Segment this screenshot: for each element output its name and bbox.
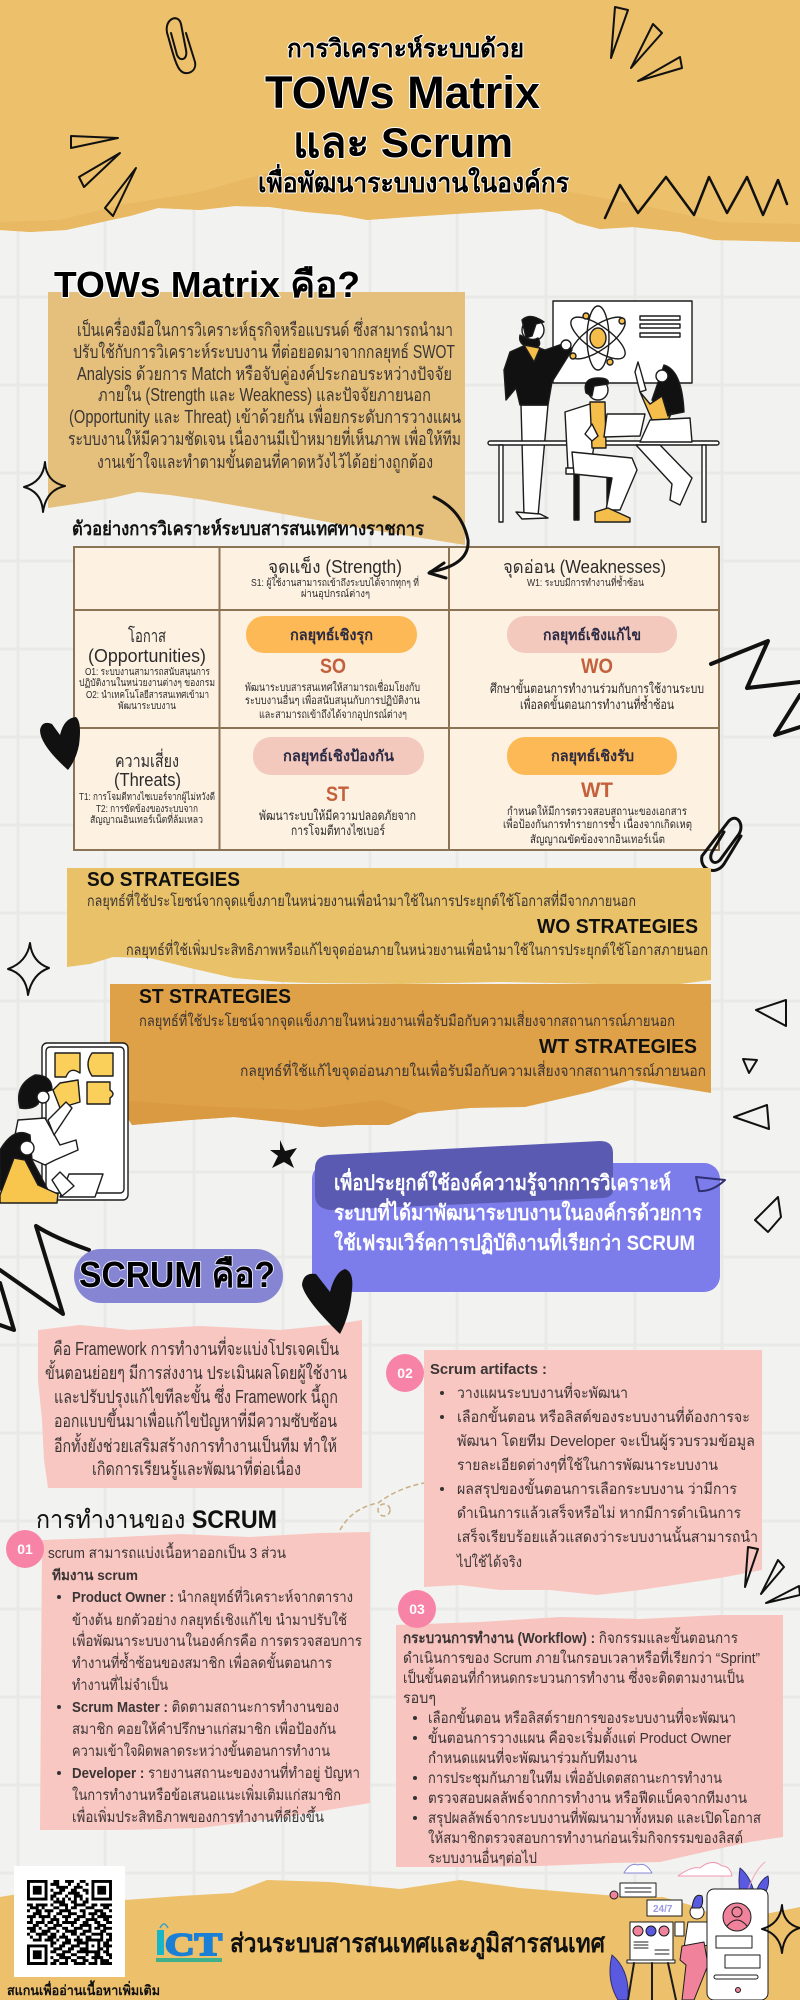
text: artifacts: [430, 1361, 758, 1571]
header: weaknesses: [503, 557, 666, 589]
icon: zigzag: [605, 177, 787, 218]
text block: definition: [68, 317, 461, 473]
row: opportunities: [79, 625, 215, 712]
logo: ICT: [156, 1924, 222, 1962]
logo: ICT: CT: [165, 1926, 222, 1962]
cell: WT: [503, 737, 692, 846]
24/7 sign: 24/7: [653, 1904, 673, 1915]
text: artifacts: ผลสรุปของขั้นตอนการเลือกระบบงาน ว่ามีการ: [457, 1478, 737, 1499]
header: weaknesses: W1: ระบบมีการทำงานที่ซ้ำซ้อน: [527, 575, 644, 589]
text: workflow: สรุปผลลัพธ์จากระบบงานที่พัฒนามาทั้งหมด และเปิดโอกาส: [428, 1807, 761, 1828]
QR code: [14, 1866, 125, 1977]
text: team: scrum สามารถแบ่งเนื้อหาออกเป็น 3 ส่วน: [48, 1542, 286, 1562]
row: opportunities: โอกาส: [128, 625, 166, 646]
text block: definition: ระบบงานให้มีความชัดเจน เนื่องานมีเป้าหมายที่เห็นภาพ เพื่อให้ทีม: [68, 426, 461, 449]
text: team: Developer : รายงานสถานะของงานที่ทำอยู่ ปัญหา: [72, 1762, 360, 1782]
panel: header torn paper: [0, 0, 800, 242]
text: callout: ใช้เฟรมเวิร์คการปฏิบัติงานที่เรียกว่า SCRUM: [334, 1227, 695, 1255]
text: SO strategies: SO STRATEGIES: [87, 869, 240, 891]
row: opportunities: ปฏิบัติงานในหน่วยงานต่างๆ ของกรม: [79, 677, 215, 689]
row: threats: T1: การโจมตีทางไซเบอร์จากผู้ไม่หวังดี: [79, 790, 215, 803]
text: team: ข้างต้น ยกตัวอย่าง กลยุทธ์เชิงแก้ไข นำมาปรับใช้: [72, 1611, 347, 1630]
panel: purple callout: [312, 1141, 720, 1292]
row: opportunities: O1: ระบบงานสามารถสนับสนุนการ: [85, 667, 211, 678]
text: team: ทีมงาน scrum: [52, 1567, 138, 1583]
text: artifacts: รายละเอียดต่างๆที่ใช้ในการพัฒนาระบบงาน: [457, 1454, 718, 1474]
text: ST strategies: ST STRATEGIES: [139, 986, 291, 1008]
text: WO strategies: กลยุทธ์ที่ใช้เพิ่มประสิทธิภาพหรือแก้ไขจุดอ่อนภายในหน่วยงานเพื่อนำมาใช้ในการประยุกต์ใช้โอกาสภายนอก: [126, 939, 708, 960]
cell: SO: และสามารถเข้าถึงได้จากอุปกรณ์ต่างๆ: [259, 708, 407, 721]
text: team: ความเข้าใจผิดพลาดระหว่างขั้นตอนการทำงาน: [72, 1740, 330, 1760]
heading: SCRUM คือ?: SCRUM คือ?: [79, 1254, 275, 1295]
text block: definition: เป็นเครื่องมือในการวิเคราะห์ธุรกิจหรือแบรนด์ ซึ่งสามารถนำมา: [77, 317, 453, 341]
text: artifacts: ดำเนินการแล้วเสร็จหรือไม่ หากมีการดำเนินการ: [457, 1503, 741, 1522]
text: workflow: [403, 1627, 761, 1867]
panel: step 03 workflow: [396, 1590, 783, 1867]
icon: star: [270, 1140, 297, 1168]
text: definition: เกิดการเรียนรู้และพัฒนาที่ต่อเนื่อง: [92, 1456, 301, 1480]
icon: sparkle footer: [762, 1905, 800, 1953]
cell: WT: สัญญาณขัดข้องจากอินเทอร์เน็ต: [530, 831, 665, 846]
text: workflow: การประชุมกันภายในทีม เพื่ออัปเดตสถานะการทำงาน: [428, 1767, 722, 1788]
text: workflow: ให้สมาชิกตรวจสอบการทำงานก่อนเริ่มกิจกรรมของลิสต์: [428, 1827, 743, 1847]
badge 02: [386, 1354, 424, 1392]
cell: WT: เพื่อป้องกันการทำรายการซ้ำ เนื่องจากเกิดเหตุ: [503, 816, 692, 831]
seated woman: [635, 362, 692, 505]
text: WO strategies: [126, 916, 708, 960]
cell: WT: กำหนดให้มีการตรวจสอบสถานะของเอกสาร: [507, 805, 687, 818]
text: team: [48, 1542, 362, 1826]
header: strength: ผ่านอุปกรณ์ต่างๆ: [301, 588, 370, 600]
text block: definition: ภายใน (Strength และ Weakness) และปัจจัยภายนอก: [98, 384, 431, 405]
text: definition: [45, 1336, 347, 1480]
text: WT strategies: [240, 1036, 706, 1081]
row: threats: ความเสี่ยง: [115, 748, 179, 771]
badge 03: 03: [409, 1601, 425, 1617]
icon: paperclip right: [702, 818, 741, 870]
man: [12, 1075, 78, 1165]
text: workflow: ขั้นตอนการวางแผน คือจะเริ่มตั้งแต่ Product Owner: [428, 1727, 731, 1747]
text: team: สมาชิก คอยให้คำปรึกษาแก่สมาชิก เพื่อป้องกัน: [72, 1718, 336, 1738]
text: department name: ส่วนระบบสารสนเทศและภูมิสารสนเทศ: [230, 1928, 605, 1960]
seated man: [565, 378, 645, 522]
text: definition: ออกแบบขึ้นมาเพื่อแก้ไขปัญหาที่มีความซับซ้อน: [54, 1408, 337, 1431]
text: team: Product Owner : นำกลยุทธ์ที่วิเคราะห์จากตาราง: [72, 1586, 353, 1607]
header: strength: [251, 555, 419, 600]
header: strength: จุดแข็ง (Strength): [268, 555, 402, 578]
cell: ST: กลยุทธ์เชิงป้องกัน: [283, 747, 395, 766]
plants: [610, 1862, 769, 2000]
badge 01: [6, 1530, 44, 1568]
row: threats: [79, 748, 215, 826]
text: callout: เพื่อประยุกต์ใช้องค์ความรู้จากการวิเคราะห์: [334, 1167, 671, 1197]
cell: SO: SO: [320, 655, 346, 678]
table: [488, 441, 719, 522]
text: WT strategies: WT STRATEGIES: [539, 1036, 697, 1058]
presenter: [675, 1895, 710, 2000]
text: SO strategies: กลยุทธ์ที่ใช้ประโยชน์จากจุดแข็งภายในหน่วยงานเพื่อนำมาใช้ในการประยุกต์ใช้โอกาสที่มีจากภายนอก: [87, 890, 636, 911]
text: workflow: ระบบงานอื่นๆต่อไป: [428, 1847, 537, 1867]
text: team: ทำงานที่ซ้ำซ้อนของสมาชิก เพื่อลดขั้นตอนการ: [72, 1652, 332, 1672]
panel: SO and WO strategies: [67, 868, 711, 984]
text: artifacts: เลือกขั้นตอน หรือลิสต์ของระบบงานที่ต้องการจะ: [457, 1406, 750, 1426]
text: artifacts: วางแผนระบบงานที่จะพัฒนา: [457, 1382, 628, 1402]
row: threats: (Threats): [114, 770, 181, 790]
panel: TOWs definition: [48, 292, 465, 545]
illustration: mobile and presenter: [610, 1862, 769, 2000]
illustration: people with puzzle board: [0, 1043, 128, 1203]
text: workflow: ตรวจสอบผลลัพธ์จากการทำงาน หรือฟีดแบ็คจากทีมงาน: [428, 1788, 747, 1807]
icon: paperclip top: [167, 18, 195, 73]
cell: ST: พัฒนาระบบให้มีความปลอดภัยจาก: [259, 808, 416, 823]
text block: definition: งานเข้าใจและทำตามขั้นตอนที่คาดหวังไว้ได้อย่างถูกต้อง: [97, 449, 433, 473]
cell: SO: ระบบงานอื่นๆ เพื่อสนับสนุนกับการปฏิบัติงาน: [245, 692, 420, 707]
table: TOWS matrix: [74, 547, 719, 850]
icon: heart center: [302, 1269, 352, 1334]
icon: sparkle left: [24, 462, 65, 512]
panel: ST and WT strategies: [110, 984, 711, 1127]
title line 2: TOWs Matrix: [265, 67, 540, 118]
icon: triangles right: [734, 1000, 786, 1232]
row: threats: T2: การขัดข้องของระบบจาก: [96, 803, 198, 815]
whiteboard: [553, 301, 692, 383]
text: workflow: กำหนดแผนที่จะพัฒนาร่วมกับทีมงาน: [428, 1747, 637, 1767]
cell: ST: การโจมตีทางไซเบอร์: [291, 823, 385, 838]
row: opportunities: (Opportunities): [88, 646, 206, 666]
text: workflow: รอบๆ: [403, 1690, 436, 1707]
cell: ST: ST: [326, 783, 349, 806]
arrow: dashed connector: [340, 1483, 424, 1530]
arrow: curved to table: [429, 497, 468, 578]
text block: definition: Analysis ด้วยการ Match หรือจับคู่องค์ประกอบระหว่างปัจจัย: [77, 364, 452, 385]
cell: SO: พัฒนาระบบสารสนเทศให้สามารถเชื่อมโยงกับ: [245, 679, 420, 694]
text block: definition: ปรับใช้กับการวิเคราะห์ระบบงาน ที่ต่อยอดมาจากกลยุทธ์ SWOT: [73, 339, 455, 363]
text: team: ทำงานที่ไม่จำเป็น: [72, 1674, 168, 1694]
text: team: เพื่อเพิ่มประสิทธิภาพของการทำงานที่ดียิ่งขึ้น: [72, 1806, 324, 1826]
text: SO strategies: [87, 869, 636, 911]
woman: [0, 1133, 103, 1203]
panel: scrum definition: [38, 1320, 362, 1488]
cell: WO: [490, 616, 704, 712]
icon: squiggle right: [711, 641, 800, 735]
icon: spikes top right: [611, 7, 682, 81]
heading: TOWs Matrix คือ?: TOWs Matrix คือ?: [54, 264, 360, 305]
text: artifacts: ไปใช้ได้จริง: [456, 1553, 522, 1571]
panel: step 01 team: [6, 1530, 370, 1830]
text: ST strategies: [139, 986, 675, 1031]
clouds: [624, 1862, 732, 1876]
title: [258, 34, 569, 198]
icon: heart left: [40, 717, 80, 770]
cell: WO: กลยุทธ์เชิงแก้ไข: [543, 625, 641, 645]
text: workflow: กระบวนการทำงาน (Workflow) : กิจกรรมและขั้นตอนการ: [403, 1627, 738, 1647]
text: callout: [334, 1167, 703, 1255]
text: definition: อีกทั้งยังช่วยเสริมสร้างการทำงานเป็นทีม ทำให้: [54, 1433, 337, 1456]
text: workflow: เลือกขั้นตอน หรือลิสต์รายการของระบบงานที่จะพัฒนา: [428, 1707, 736, 1727]
panel: step 02 artifacts: [386, 1350, 762, 1595]
header: weaknesses: จุดอ่อน (Weaknesses): [503, 557, 666, 578]
text: callout: ระบบที่ได้มาพัฒนาระบบงานในองค์กรด้วยการ: [334, 1197, 703, 1225]
text: WT strategies: กลยุทธ์ที่ใช้แก้ไขจุดอ่อนภายในเพื่อรับมือกับความเสี่ยงจากสถานการณ์ภายนอก: [240, 1060, 706, 1081]
badge 03: [398, 1590, 436, 1628]
illustration: team at whiteboard: [488, 301, 719, 522]
icon: bowl shape on callout: [696, 1177, 725, 1191]
icon: spikes left: [71, 136, 136, 216]
icon: zigzag left: [0, 1226, 89, 1330]
text: ST strategies: กลยุทธ์ที่ใช้ประโยชน์จากจุดแข็งภายในหน่วยงานเพื่อรับมือกับความเสี่ยงจากสถานการณ์ภายนอก: [139, 1010, 675, 1031]
text block: definition: (Opportunity และ Threat) เข้าด้วยกัน เพื่อยกระดับการวางแผน: [69, 404, 461, 427]
speech bubble: [610, 1883, 656, 1899]
cell: ST: [253, 737, 424, 838]
cell: WO: เพื่อลดขั้นตอนการทำงานที่ซ้ำซ้อน: [520, 695, 674, 712]
text: definition: ขั้นตอนย่อยๆ มีการส่งงาน ประเมินผลโดยผู้ใช้งาน: [45, 1360, 347, 1384]
cell: SO: กลยุทธ์เชิงรุก: [290, 626, 373, 645]
heading: table title: ตัวอย่างการวิเคราะห์ระบบสารสนเทศทางราชการ: [72, 518, 425, 540]
header: strength: S1: ผู้ใช้งานสามารถเข้าถึงระบบได้จากทุกๆ ที่: [251, 575, 419, 589]
text: artifacts: เสร็จเรียบร้อยแล้วแสดงว่าระบบงานนั้นสามารถนำ: [457, 1526, 758, 1546]
text: QR caption: สแกนเพื่ออ่านเนื้อหาเพิ่มเติม: [7, 1980, 160, 1998]
text: definition: และปรับปรุงแก้ไขทีละขั้น ซึ่ง Framework นี้ถูก: [54, 1384, 338, 1408]
panel: footer torn paper: [0, 1880, 800, 2000]
heading: การทำงานของ SCRUM: การทำงานของ SCRUM: [36, 1506, 277, 1534]
text: team: ในการทำงานหรือข้อเสนอแนะเพิ่มเติมแก่สมาชิก: [72, 1784, 341, 1804]
row: threats: สัญญาณอินเทอร์เน็ตที่ล้มเหลว: [90, 812, 203, 826]
text: artifacts: พัฒนา โดยทีม Developer จะเป็นผู้รวบรวมข้อมูล: [457, 1431, 755, 1450]
cell: WO: WO: [581, 655, 613, 678]
text: definition: คือ Framework การทำงานที่จะแบ่งโปรเจคเป็น: [53, 1336, 339, 1359]
row: opportunities: พัฒนาระบบงาน: [118, 701, 176, 712]
standing man: [504, 316, 572, 519]
text: team: Scrum Master : ติดตามสถานะการทำงานของ: [72, 1699, 339, 1716]
board: [42, 1043, 128, 1200]
title line 3: และ Scrum: [293, 119, 513, 166]
badge 02: 02: [397, 1365, 413, 1381]
easel: [627, 1922, 676, 2000]
cell: WO: ศึกษาขั้นตอนการทำงานร่วมกับการใช้งานระบบ: [490, 679, 704, 696]
phone: [707, 1889, 768, 2000]
icon: spikes lower right: [745, 1547, 800, 1603]
row: opportunities: O2: นำเทคโนโลยีสารสนเทศเข้ามา: [86, 688, 209, 701]
text: team: เพื่อพัฒนาระบบงานในองค์กรคือ การตรวจสอบการ: [72, 1630, 362, 1650]
24/7 sign: [647, 1900, 682, 1916]
cell: WT: กลยุทธ์เชิงรับ: [551, 747, 634, 766]
text: artifacts: Scrum artifacts :: [430, 1361, 547, 1378]
title line 4: เพื่อพัฒนาระบบงานในองค์กร: [258, 163, 569, 198]
badge 01: 01: [17, 1541, 33, 1557]
text: workflow: เป็นขั้นตอนที่กำหนดกระบวนการทำงาน ซึ่งจะติดตามงานเป็น: [403, 1667, 744, 1687]
text: workflow: ดำเนินการของ Scrum ภายในกรอบเวลาหรือที่เรียกว่า “Sprint”: [403, 1647, 760, 1667]
cell: WT: WT: [581, 779, 613, 802]
icon: sparkle mid left: [8, 943, 49, 995]
text: WO strategies: WO STRATEGIES: [537, 916, 698, 938]
cell: SO: [245, 616, 420, 721]
title line 1: การวิเคราะห์ระบบด้วย: [287, 34, 524, 63]
